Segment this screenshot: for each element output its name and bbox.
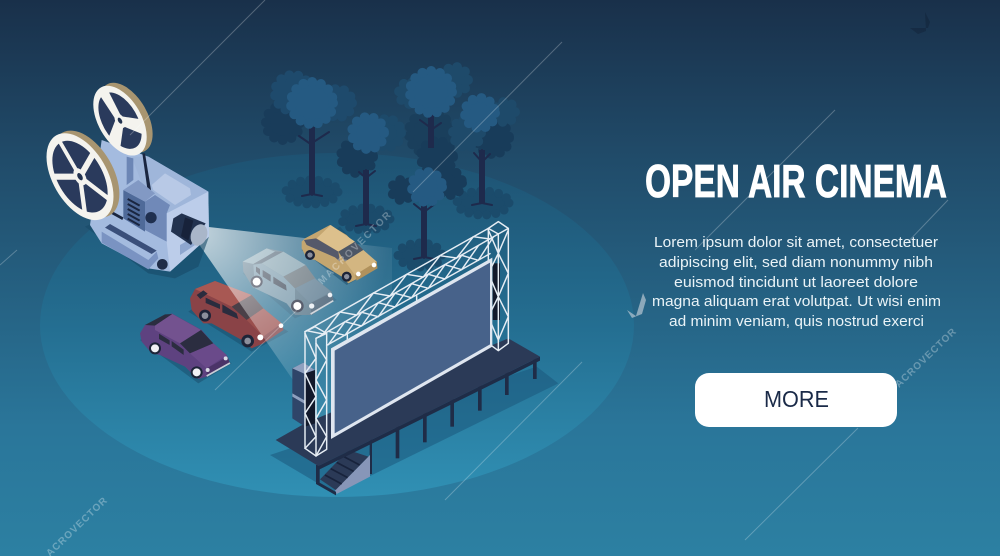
base slots [102, 232, 158, 269]
film projector [33, 74, 210, 278]
dark back foliage [266, 67, 515, 200]
screen frame [331, 258, 492, 439]
watermarks [44, 210, 959, 556]
film reels [33, 74, 164, 232]
small artefact marks [627, 12, 930, 318]
big film reel [33, 119, 133, 232]
light crowns [291, 71, 495, 202]
stage shadow [270, 367, 558, 493]
vent panel [123, 180, 155, 232]
trees [266, 67, 515, 267]
stage legs [316, 357, 537, 483]
drive belts [142, 153, 151, 191]
description text: adipiscing elit, sed diam nonummy nibh [659, 255, 933, 271]
car: silver [243, 248, 337, 318]
watermarks: ACROVECTOR [893, 326, 959, 390]
car: purple [140, 313, 232, 383]
outdoor screen stage [270, 222, 558, 495]
foot [157, 259, 168, 270]
screen surface [335, 263, 490, 433]
car: yellow [302, 225, 377, 285]
projector housing [90, 140, 209, 272]
more button: MORE [764, 386, 829, 412]
lens box [145, 195, 170, 242]
description text: magna aliquam erat volutpat. Ut wisi enim [652, 294, 941, 310]
lens [171, 213, 210, 248]
stage deck [318, 357, 540, 470]
projector body [85, 140, 210, 278]
projector light beam [196, 226, 392, 440]
trunks [299, 115, 492, 259]
speakers [292, 263, 500, 427]
stairs [316, 450, 370, 495]
projector shadow [85, 197, 209, 278]
car: red [188, 281, 288, 352]
round ground area [40, 153, 634, 497]
description text [652, 235, 941, 330]
more button [695, 373, 897, 427]
small film reel [82, 74, 164, 165]
steel truss [305, 222, 508, 456]
description text: ad minim veniam, quis nostrud exerci [669, 314, 924, 330]
description text: euismod tincidunt ut laoreet dolore [674, 275, 918, 291]
watermarks: MACROVECTOR [316, 210, 394, 287]
column shading [127, 157, 133, 185]
description text: Lorem ipsum dolor sit amet, consectetuer [654, 235, 938, 251]
tree shadows [286, 180, 509, 267]
